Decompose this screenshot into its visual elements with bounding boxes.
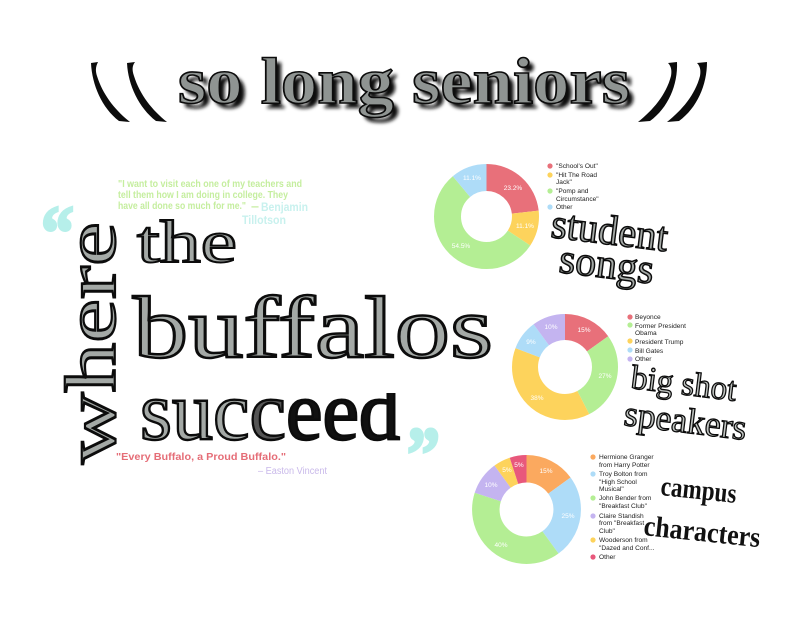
word: succeed: succeed xyxy=(140,365,400,458)
donut chart: student songs xyxy=(448,175,534,256)
label: campus characters: characters xyxy=(642,510,762,554)
legend: campus characters: Claire Standish xyxy=(599,513,644,520)
legend: big shot speakers: President Trump xyxy=(635,339,684,346)
label: big shot speakers: big shot xyxy=(629,359,739,409)
legend: campus characters: "High School xyxy=(599,479,637,486)
legend: student songs: "Hit The Road xyxy=(556,172,597,179)
donut chart: big shot speakers: 10% xyxy=(544,324,558,331)
donut chart: campus characters: 5% xyxy=(502,467,512,474)
legend: campus characters: Club" xyxy=(599,528,616,535)
quote: Benjamin Tillotson: "I want to visit each one of my teachers and xyxy=(118,179,302,190)
donut chart: big shot speakers: 9% xyxy=(526,339,536,346)
opening quotation mark: “ xyxy=(41,191,74,275)
title xyxy=(91,45,707,123)
word: buffalos: buffalos xyxy=(133,280,493,377)
legend: big shot speakers: Bill Gates xyxy=(635,348,664,355)
right brackets xyxy=(638,62,707,122)
legend: campus characters: Troy Bolton from xyxy=(599,471,648,478)
quote: Benjamin Tillotson: – xyxy=(251,199,259,213)
donut chart: campus characters: 15% xyxy=(539,468,553,475)
donut chart: big shot speakers: 15% xyxy=(577,327,591,334)
word: the: the xyxy=(137,209,237,275)
title shadow: so long seniors xyxy=(183,50,635,123)
donut chart: student songs: 54.5% xyxy=(452,243,470,250)
label: campus characters xyxy=(642,471,762,554)
donut chart: campus characters: 10% xyxy=(484,482,498,489)
label: big shot speakers: speakers xyxy=(622,393,749,448)
donut chart: campus characters: 25% xyxy=(561,513,575,520)
donut chart: big shot speakers xyxy=(525,324,612,407)
legend: big shot speakers: Other xyxy=(635,356,652,363)
label: student songs xyxy=(549,201,671,294)
donut chart: big shot speakers: 27% xyxy=(598,373,612,380)
legend: student songs: Other xyxy=(556,204,573,211)
closing quotation mark: ” xyxy=(407,413,440,497)
legend: big shot speakers: Former President xyxy=(635,323,686,330)
legend: big shot speakers: Obama xyxy=(635,330,657,337)
legend: campus characters xyxy=(590,454,655,561)
donut chart: campus characters xyxy=(484,462,575,550)
label: student songs: student xyxy=(549,201,671,261)
legend: student songs: "School's Out" xyxy=(556,163,599,170)
quote: Easton Vincent xyxy=(116,451,327,477)
quote: Benjamin Tillotson: tell them how I am doing in college. They xyxy=(118,190,288,201)
label: big shot speakers xyxy=(622,359,749,448)
legend: campus characters: Wooderson from xyxy=(599,537,648,544)
donut chart: student songs: 11.1% xyxy=(463,175,481,182)
quote: Benjamin Tillotson xyxy=(118,179,308,227)
label: student songs: songs xyxy=(557,236,657,294)
legend: big shot speakers xyxy=(627,314,686,363)
quote: Easton Vincent: – Easton Vincent xyxy=(258,466,327,477)
legend: campus characters: "Breakfast Club" xyxy=(599,503,648,510)
legend: campus characters: John Bender from xyxy=(599,495,652,502)
legend: student songs: Jack" xyxy=(556,179,573,186)
donut chart: campus characters: 5% xyxy=(514,462,524,469)
legend: campus characters: "Dazed and Conf... xyxy=(599,545,655,552)
legend: student songs: "Pomp and xyxy=(556,188,589,195)
donut chart: student songs: 11.1% xyxy=(516,223,534,230)
legend: student songs: Circumstance" xyxy=(556,196,599,203)
quote: Benjamin Tillotson: Benjamin xyxy=(261,200,308,214)
legend: campus characters: Musical" xyxy=(599,486,624,493)
title text: so long seniors xyxy=(178,45,630,118)
quote: Benjamin Tillotson: Tillotson xyxy=(242,213,286,227)
legend: campus characters: Hermione Granger xyxy=(599,454,654,461)
legend: student songs xyxy=(547,163,599,211)
legend: campus characters: Other xyxy=(599,554,616,561)
left brackets xyxy=(91,62,167,122)
legend: big shot speakers: Beyonce xyxy=(635,314,661,321)
quote: Benjamin Tillotson: have all done so much for me." xyxy=(118,201,246,212)
label: campus characters: campus xyxy=(659,471,738,510)
legend: campus characters: from "Breakfast xyxy=(599,520,644,527)
quote: Easton Vincent: "Every Buffalo, a Proud Buffalo." xyxy=(116,451,286,463)
donut chart: campus characters: 40% xyxy=(494,542,508,549)
vertical word: where: where xyxy=(51,222,131,464)
legend: campus characters: from Harry Potter xyxy=(599,462,650,469)
donut chart: big shot speakers: 38% xyxy=(530,395,544,402)
donut chart: student songs: 23.2% xyxy=(504,185,522,192)
